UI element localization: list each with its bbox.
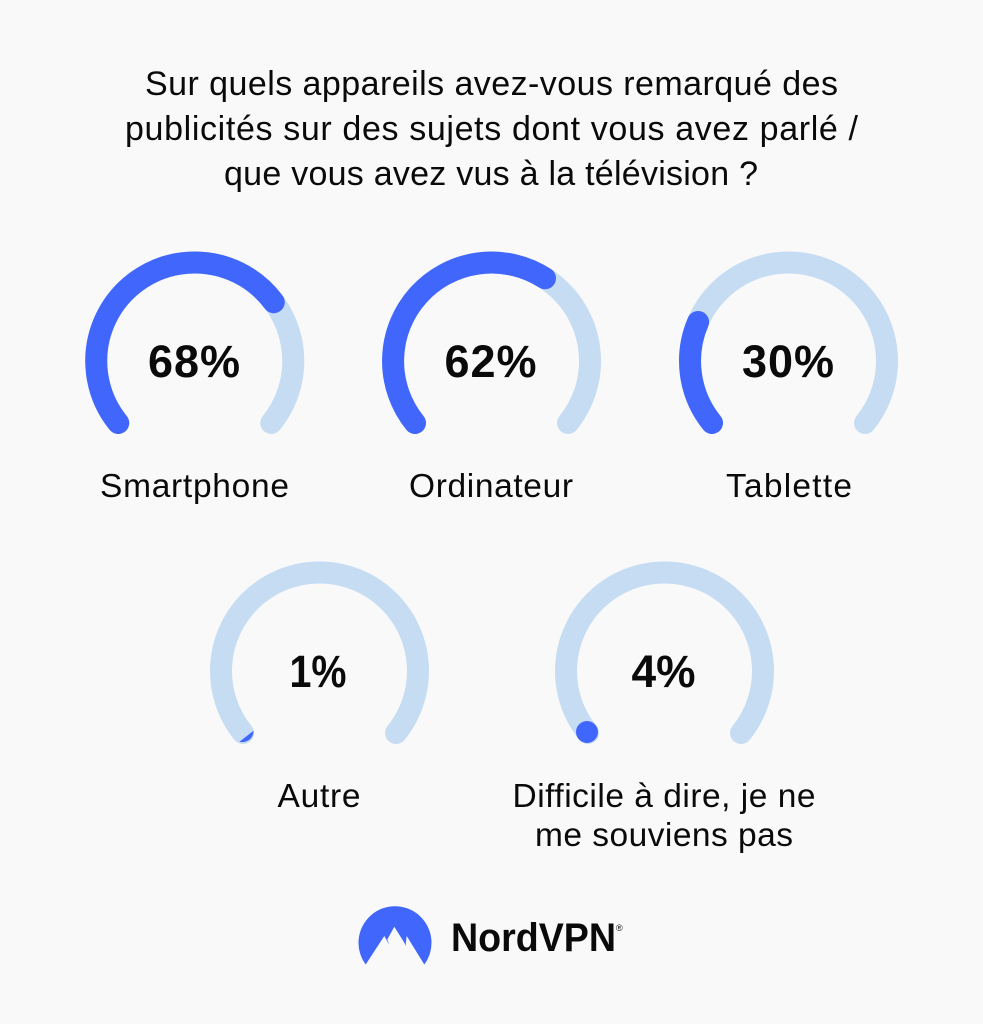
gauge: Smartphone 68%: Smartphone [100, 468, 289, 505]
gauge: Difficile à dire 4%: me souviens pas [535, 817, 793, 854]
logo: NordVPN: ® [616, 923, 623, 933]
gauge: Ordinateur 62%: Ordinateur [409, 468, 573, 505]
gauge: Smartphone 68% [96, 262, 293, 505]
gauge: Autre 1%: Autre [278, 778, 360, 815]
title: publicités sur des sujets dont vous avez parlé / [125, 110, 859, 148]
title: Sur quels appareils avez-vous remarqué des [145, 65, 838, 103]
title: que vous avez vus à la télévision ? [224, 155, 758, 193]
gauge: Difficile à dire 4% [512, 572, 816, 854]
gauge: Ordinateur 62% [393, 262, 590, 505]
title [125, 65, 859, 193]
gauge: Autre 1% [221, 572, 418, 815]
logo: NordVPN: NordVPN [451, 916, 616, 960]
gauge: Tablette 30% [690, 262, 887, 505]
gauge: Ordinateur 62%: 62% [444, 336, 536, 387]
icon: mountain dome [358, 906, 432, 964]
gauge: Smartphone 68%: 68% [148, 336, 240, 387]
gauge: Difficile à dire 4%: 4% [632, 646, 696, 697]
gauge: Difficile à dire 4%: Difficile à dire, je ne [512, 778, 816, 815]
logo: NordVPN [358, 906, 623, 964]
gauge: Autre 1%: 1% [290, 646, 346, 697]
gauge: Tablette 30%: Tablette [726, 468, 852, 505]
gauge: Tablette 30%: 30% [742, 336, 834, 387]
